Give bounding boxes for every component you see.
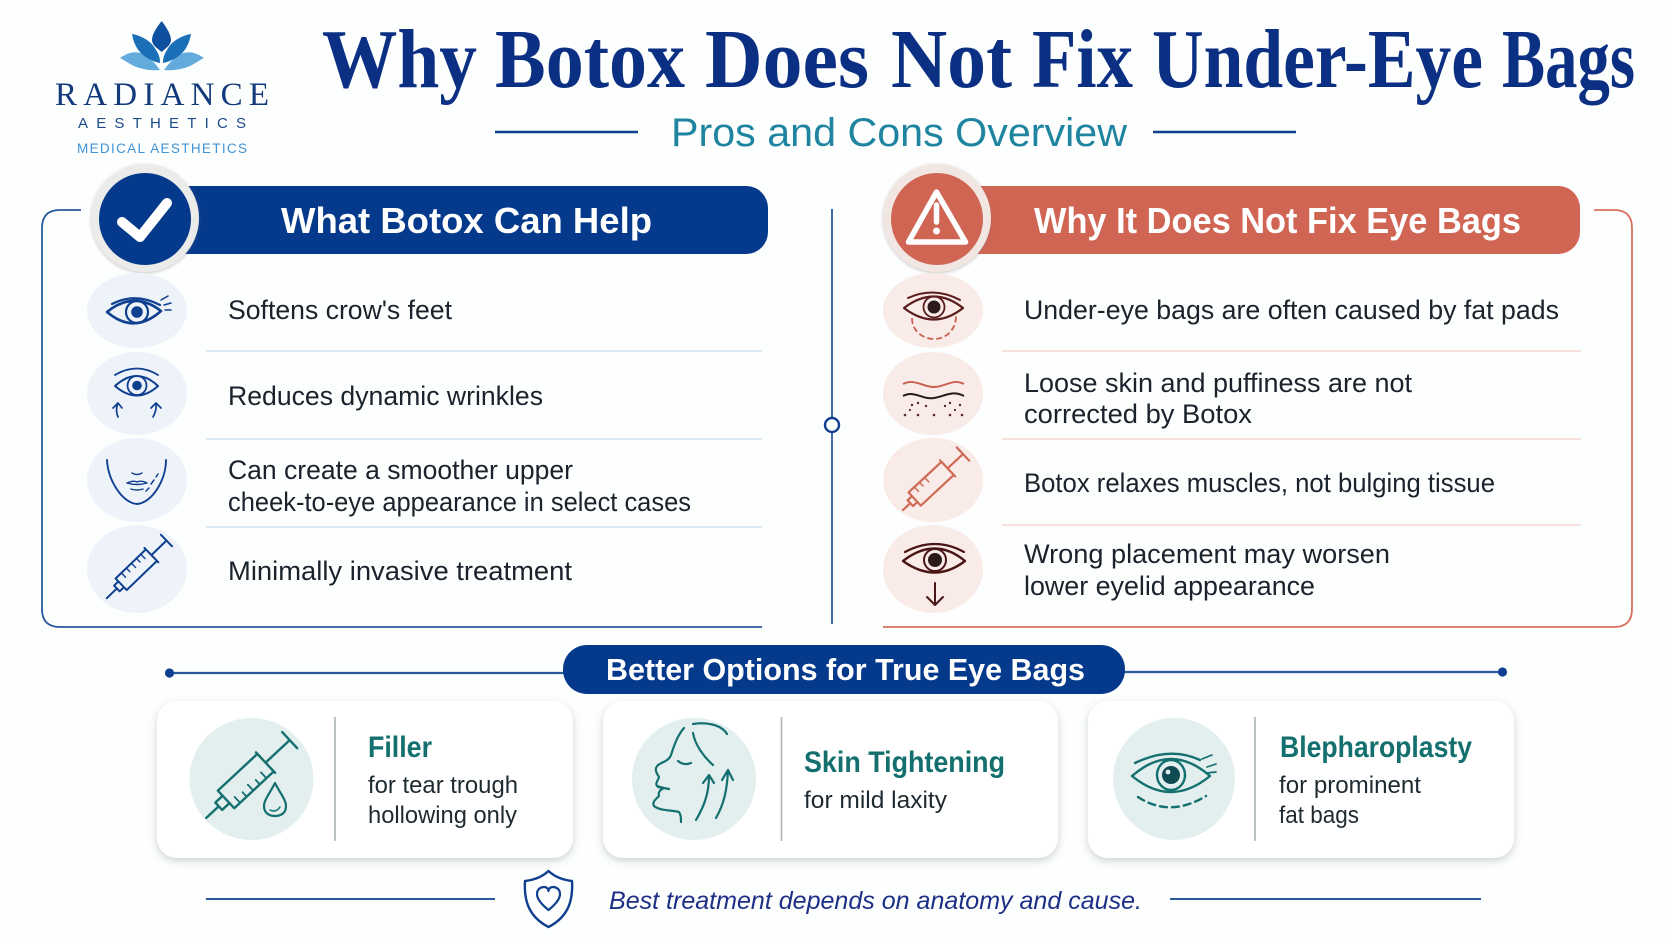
card: skin tightening (603, 701, 1058, 858)
logo wordmark: RADIANCE (55, 77, 269, 113)
logo subline: AESTHETICS (78, 115, 246, 132)
title: Botox (495, 13, 685, 106)
header bar: Why It Does Not Fix Eye Bags (1034, 200, 1521, 241)
text: Can create a smoother upper (228, 455, 573, 485)
icon: eye with crow's feet (87, 273, 187, 348)
header bar (91, 164, 768, 272)
card: blepharoplasty (1088, 701, 1514, 858)
text: Loose skin and puffiness are not (1024, 368, 1412, 398)
row: loose skin: corrected by Botox (1024, 399, 1252, 429)
icon: eye with up arrows (87, 352, 187, 435)
icon: syringe (87, 525, 187, 613)
icon: eye with incision line (1113, 718, 1235, 840)
panel: why it does not fix eye bags (883, 164, 1632, 627)
card: skin tightening: for mild laxity (804, 787, 948, 814)
center divider (825, 209, 839, 624)
icon: shield with heart (525, 871, 572, 927)
text: Wrong placement may worsen (1024, 539, 1390, 569)
panel: what Botox can help (42, 164, 768, 627)
row: reduces dynamic wrinkles (87, 352, 543, 435)
subtitle: Pros and Cons Overview (671, 111, 1127, 155)
row: fat pads (883, 273, 1559, 348)
card text: Skin Tightening (804, 746, 1005, 779)
panel outline (883, 210, 1632, 627)
logo: Radiance Aesthetics (55, 21, 269, 156)
row: wrong placement (883, 525, 1390, 613)
row: loose skin (883, 352, 1412, 435)
panel outline (42, 210, 762, 627)
note text: Best treatment depends on anatomy and cause. (609, 887, 1142, 915)
footer note (206, 871, 1481, 927)
logo tagline: MEDICAL AESTHETICS (77, 141, 247, 156)
header bar (883, 164, 1580, 272)
icon: eye with down arrow (883, 525, 983, 613)
text: Reduces dynamic wrinkles (228, 381, 543, 411)
row: minimally invasive (87, 525, 573, 613)
card: blepharoplasty: for prominent (1279, 772, 1421, 799)
title: Not (891, 13, 1012, 106)
text: Minimally invasive treatment (228, 556, 573, 586)
title: Bags (1502, 13, 1635, 106)
icon: syringe (883, 438, 983, 522)
icon: eye with fat pad (883, 273, 983, 348)
title (322, 13, 1635, 106)
card text: Filler (368, 731, 432, 764)
icon: skin layers (883, 352, 983, 435)
text: Botox relaxes muscles, not bulging tissue (1024, 468, 1495, 498)
card: filler (157, 701, 573, 858)
row: smoother upper cheek-to-eye (87, 438, 691, 522)
card text: Blepharoplasty (1280, 731, 1472, 764)
row: smoother upper cheek-to-eye: cheek-to-eye appearance in select cases (228, 487, 691, 517)
text: Under-eye bags are often caused by fat pads (1024, 295, 1559, 325)
header bar: What Botox Can Help (281, 200, 652, 241)
card: filler: for tear trough (368, 772, 518, 799)
card: filler: hollowing only (368, 802, 518, 829)
icon: syringe and drop (190, 718, 314, 840)
row: softens crow's feet (87, 273, 452, 348)
title: Does (705, 13, 869, 106)
title: Why (322, 13, 477, 106)
text: Softens crow's feet (228, 295, 452, 325)
icon: face profile with arrows (632, 718, 756, 840)
row: wrong placement: lower eyelid appearance (1024, 571, 1315, 601)
icon: lower face (87, 438, 187, 522)
section heading: better options (165, 645, 1507, 694)
title: Fix (1032, 13, 1133, 106)
title: Under-Eye (1152, 13, 1483, 106)
row: relaxes muscles (883, 438, 1495, 522)
card: blepharoplasty: fat bags (1279, 802, 1359, 829)
icon: lotus (120, 21, 204, 70)
section heading: better options: Better Options for True Eye Bags (606, 652, 1085, 687)
